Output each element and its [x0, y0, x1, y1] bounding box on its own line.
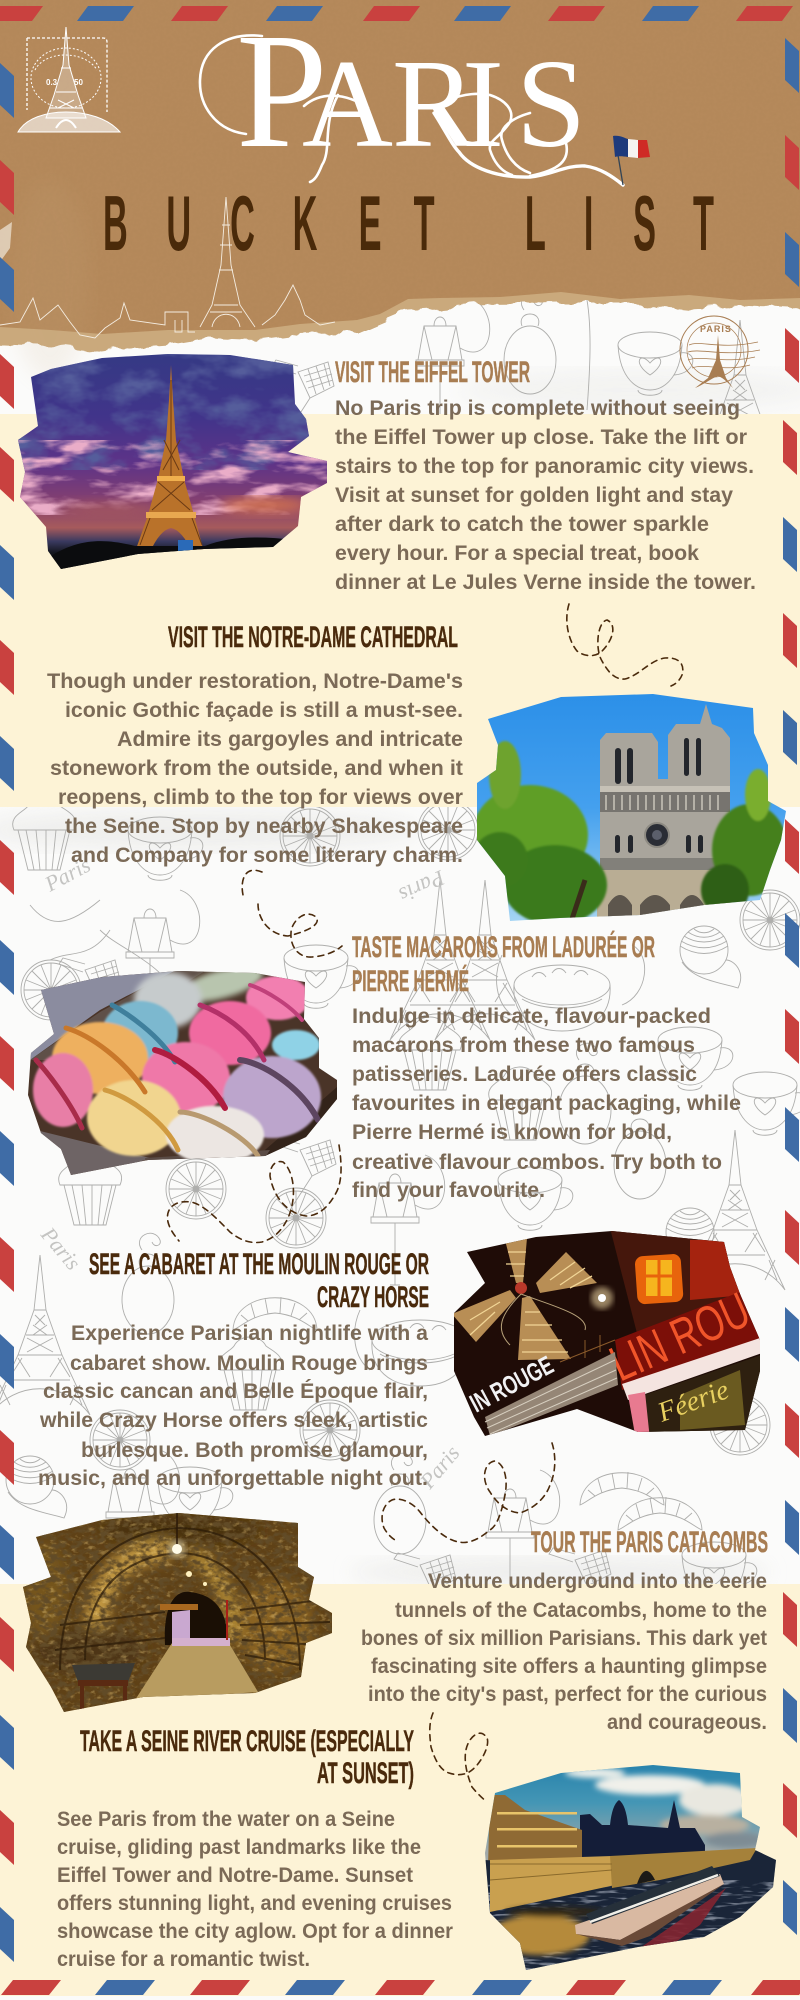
- text block: Seine cruise: See Paris from the water on a Seine: [57, 1807, 395, 1831]
- text block: Eiffel Tower: No Paris trip is complete without seeing: [335, 396, 740, 420]
- background: paper blotches: [0, 370, 800, 1586]
- text block: cabaret: Experience Parisian nightlife with a: [71, 1321, 429, 1345]
- text block: Seine cruise: showcase the city aglow. Opt for a dinner: [57, 1919, 454, 1943]
- illustration: Paris skyline: [0, 197, 335, 418]
- text block: catacombs: fascinating site offers a haunting glimpse: [371, 1654, 767, 1678]
- text block: macarons: Pierre Hermé is known for bold,: [352, 1120, 672, 1144]
- text block: macarons: Indulge in delicate, flavour-packed: [352, 1004, 711, 1028]
- text block: Eiffel Tower: Visit at sunset for golden light and stay: [335, 483, 733, 507]
- text block: catacombs: tunnels of the Catacombs, home to the: [395, 1598, 767, 1622]
- icon: Eiffel Tower stamp: 50: [74, 78, 83, 87]
- background: line-art doodles: Paris: [40, 852, 94, 897]
- text block: catacombs: Venture underground into the eerie: [428, 1569, 767, 1593]
- photo: Eiffel Tower at dusk: [15, 350, 335, 580]
- text block: Seine cruise: cruise for a romantic twist.: [57, 1947, 310, 1971]
- dashed path 5: [430, 1713, 488, 1802]
- text block: Seine cruise: Eiffel Tower and Notre-Dame. Sunset: [57, 1863, 413, 1887]
- icon: postmark stamp: [680, 316, 760, 388]
- heading: Seine cruise: TAKE A SEINE RIVER CRUISE (ESPECIALLY: [80, 1725, 414, 1758]
- icon: postmark stamp: PARIS: [700, 324, 732, 334]
- heading: cabaret: [89, 1248, 429, 1314]
- text block: macarons: [352, 1004, 741, 1202]
- text block: Notre-Dame: [47, 669, 464, 867]
- heading: macarons: PIERRE HERMÉ: [352, 964, 469, 998]
- heading: Seine cruise: AT SUNSET): [317, 1757, 414, 1790]
- text block: cabaret: [38, 1321, 429, 1490]
- icon: French flag: [613, 136, 650, 185]
- text block: cabaret: music, and an unforgettable night out.: [38, 1466, 428, 1490]
- text block: Seine cruise: cruise, gliding past landmarks like the: [57, 1835, 421, 1859]
- dashed path 2: [242, 870, 342, 957]
- text block: cabaret: classic cancan and Belle Époque flair,: [43, 1378, 428, 1403]
- dashed path 4: [382, 1443, 555, 1542]
- text block: cabaret: burlesque. Both promise glamour,: [81, 1438, 428, 1462]
- dashed path 1: [567, 604, 683, 686]
- heading: Seine cruise: [80, 1725, 414, 1790]
- heading: Notre-Dame: VISIT THE NOTRE-DAME CATHEDRAL: [168, 621, 458, 654]
- header: torn kraft paper: [0, 0, 800, 380]
- text block: Eiffel Tower: dinner at Le Jules Verne inside the tower.: [335, 570, 756, 594]
- text block: Eiffel Tower: the Eiffel Tower up close. Take the lift or: [335, 425, 748, 449]
- kraft-area stripes: [0, 6, 799, 312]
- text block: Eiffel Tower: stairs to the top for panoramic city views.: [335, 454, 754, 478]
- photo: Moulin Rouge: IN ROUGE: [465, 1350, 558, 1418]
- background: line-art doodles: Paris: [36, 1221, 86, 1275]
- background: line-art doodles: Paris: [414, 1441, 464, 1494]
- panel: cream band upper: [0, 414, 800, 807]
- panel: cream band lower: [0, 1584, 800, 1996]
- text block: catacombs: bones of six million Parisians. This dark yet: [361, 1626, 767, 1650]
- icon: Eiffel Tower stamp: [18, 27, 120, 132]
- text block: macarons: favourites in elegant packaging, while: [352, 1091, 741, 1115]
- text block: Eiffel Tower: every hour. For a special treat, book: [335, 541, 699, 565]
- text block: Notre-Dame: iconic Gothic façade is still a must-see.: [65, 698, 463, 722]
- heading: Eiffel Tower: VISIT THE EIFFEL TOWER: [335, 356, 530, 389]
- text block: Notre-Dame: stonework from the outside, and when it: [50, 756, 463, 780]
- title: bucket list: BUCKET LIST: [103, 179, 714, 267]
- text block: Notre-Dame: the Seine. Stop by nearby Shakespeare: [65, 814, 463, 838]
- text block: cabaret: while Crazy Horse offers sleek, artistic: [39, 1408, 428, 1432]
- text block: catacombs: [361, 1569, 767, 1734]
- background: line-art doodles: [0, 293, 800, 1625]
- title: Paris: P: [236, 0, 328, 182]
- text block: Eiffel Tower: [335, 396, 756, 594]
- text block: Notre-Dame: Though under restoration, Notre-Dame's: [47, 669, 463, 693]
- text block: Notre-Dame: reopens, climb to the top for views over: [58, 785, 464, 809]
- text block: macarons: creative flavour combos. Try both to: [352, 1150, 722, 1174]
- heading: macarons: [352, 930, 655, 998]
- title: Paris: ARIS: [302, 35, 586, 174]
- photo: Seine river cruise: [480, 1760, 780, 1975]
- heading: cabaret: CRAZY HORSE: [317, 1281, 429, 1314]
- text block: catacombs: into the city's past, perfect for the curious: [368, 1682, 767, 1706]
- background: line-art doodles: Paris: [395, 865, 450, 908]
- title: Paris: [200, 0, 623, 185]
- text block: Notre-Dame: Admire its gargoyles and intricate: [117, 727, 463, 751]
- photo: Catacombs tunnel: [20, 1510, 335, 1715]
- photo: Moulin Rouge: Féerie: [653, 1374, 733, 1429]
- photo: Moulin Rouge: LIN ROUGE: [602, 1262, 800, 1392]
- text block: catacombs: and courageous.: [607, 1710, 767, 1734]
- text block: Eiffel Tower: after dark to catch the tower sparkle: [335, 512, 709, 536]
- photo: Notre-Dame Cathedral: [470, 690, 790, 925]
- photo: Moulin Rouge: [454, 1231, 760, 1436]
- text block: macarons: macarons from these two famous: [352, 1033, 695, 1057]
- text block: macarons: find your favourite.: [352, 1178, 545, 1202]
- text block: Notre-Dame: and Company for some literary charm.: [71, 843, 463, 867]
- text block: Seine cruise: offers stunning light, and evening cruises: [57, 1891, 452, 1915]
- heading: cabaret: SEE A CABARET AT THE MOULIN ROUGE OR: [89, 1248, 429, 1281]
- photo: macarons: [28, 971, 337, 1175]
- icon: Eiffel Tower stamp: 0.3: [46, 78, 58, 87]
- text block: macarons: patisseries. Ladurée offers classic: [352, 1062, 697, 1086]
- text block: Seine cruise: [57, 1807, 454, 1971]
- dashed path 3: [167, 1145, 341, 1243]
- text block: cabaret: cabaret show. Moulin Rouge brings: [70, 1351, 428, 1375]
